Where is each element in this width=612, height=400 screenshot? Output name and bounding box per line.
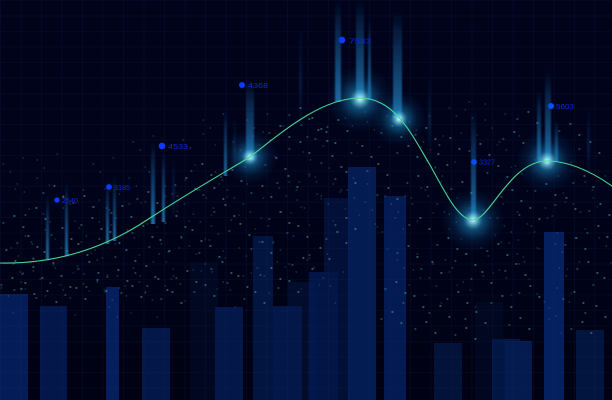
particle field (0, 102, 612, 339)
bar 12 (434, 343, 462, 400)
label 4533: 4533 (168, 142, 188, 151)
label 5603: 5603 (556, 102, 574, 111)
bar 9 (324, 198, 352, 400)
bar 3 (106, 287, 119, 400)
glow 5 (515, 129, 579, 193)
bar 15 (544, 232, 564, 400)
data labels (54, 36, 574, 205)
label 4368 (239, 81, 268, 90)
glow 4 (441, 188, 505, 252)
label 3185: 3185 (114, 183, 130, 192)
glow 2 (326, 65, 394, 133)
bar 1 (0, 294, 28, 400)
glow points on curve (222, 65, 579, 252)
bar chart (0, 167, 604, 400)
light beams (46, 0, 590, 260)
dim back bars (190, 262, 503, 400)
bar 16 (576, 330, 604, 400)
label 5603 (548, 102, 574, 111)
label 7583 (339, 36, 371, 46)
label 4533 (159, 142, 188, 151)
label 3327: 3327 (479, 158, 495, 166)
label 2540 (54, 196, 78, 205)
bar 11 (384, 196, 406, 400)
label 7583: 7583 (349, 36, 371, 46)
bar 4 (142, 328, 170, 400)
glow 3 (371, 91, 427, 147)
glow 1 (222, 129, 278, 185)
line curve (0, 98, 612, 263)
label 2540: 2540 (62, 196, 78, 205)
label 3185 (106, 183, 130, 192)
bar 6 (253, 236, 273, 400)
bar 5 (215, 307, 243, 400)
bar 8 (309, 272, 338, 400)
bar 2 (40, 306, 67, 400)
bar 13 (492, 339, 520, 400)
bar 10 (348, 167, 376, 400)
label 3327 (471, 158, 495, 166)
label 4368: 4368 (248, 81, 268, 90)
bar 7 (273, 306, 302, 400)
bar 14 (505, 341, 532, 400)
